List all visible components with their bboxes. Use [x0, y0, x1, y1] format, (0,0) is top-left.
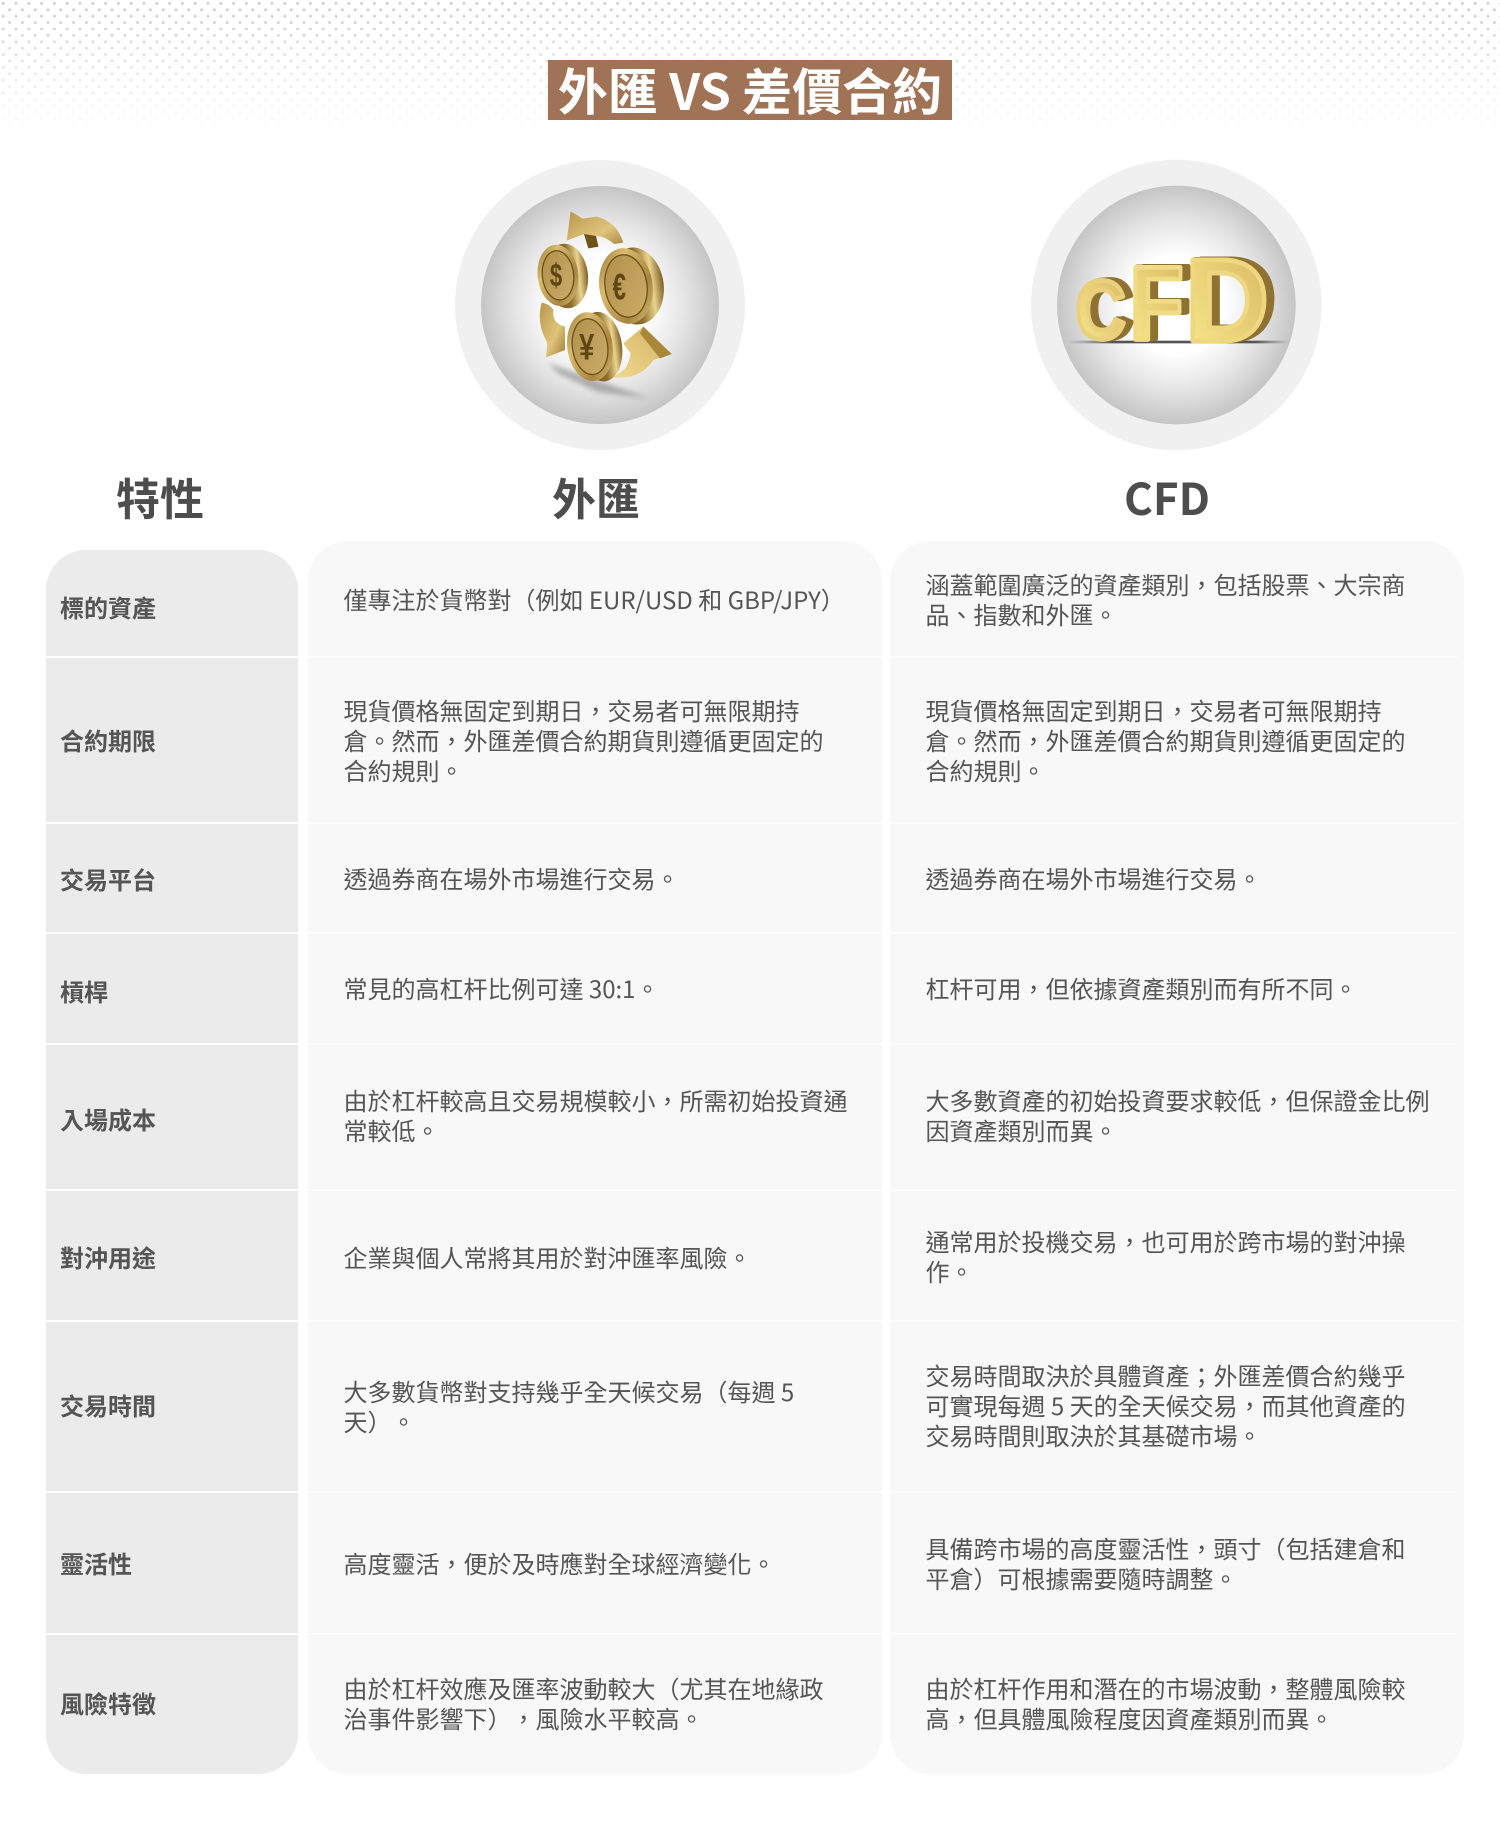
text: forex hedging: 企業與個人常將其用於對沖匯率風險。: [344, 1239, 752, 1274]
text: CFD contract term: [926, 692, 1406, 787]
text: CFD trading hours: 交易時間則取決於其基礎市場。: [926, 1417, 1262, 1452]
text: CFD entry cost: [926, 1082, 1430, 1147]
text: forex underlying: 僅專注於貨幣對（例如 EUR/USD 和 GBP/JPY）: [344, 581, 845, 616]
text: CFD trading hours: [926, 1357, 1406, 1452]
heading: 特性: 特性: [116, 464, 204, 528]
label: 對沖用途: 對沖用途: [60, 1239, 156, 1274]
text: CFD leverage: 杠杆可用，但依據資產類別而有所不同。: [926, 970, 1358, 1005]
icon: forex coins: [455, 160, 745, 450]
text: forex entry cost: 由於杠杆較高且交易規模較小，所需初始投資通: [344, 1082, 848, 1117]
text: CFD hedging: 通常用於投機交易，也可用於跨市場的對沖操: [926, 1223, 1406, 1258]
text: CFD underlying: 品、指數和外匯。: [926, 596, 1118, 631]
text: CFD platform: 透過券商在場外市場進行交易。: [926, 860, 1262, 895]
text: forex contract term: [344, 692, 824, 787]
text: forex contract term: 倉。然而，外匯差價合約期貨則遵循更固定的: [344, 722, 824, 757]
text: CFD hedging: 作。: [926, 1253, 974, 1288]
text: CFD trading hours: 可實現每週 5 天的全天候交易，而其他資產的: [926, 1387, 1406, 1422]
text: forex contract term: 現貨價格無固定到期日，交易者可無限期持: [344, 692, 800, 727]
text: CFD contract term: 倉。然而，外匯差價合約期貨則遵循更固定的: [926, 722, 1406, 757]
icon: CFD gold letters: [1031, 160, 1322, 450]
heading: 外匯: 外匯: [552, 464, 640, 528]
label: 合約期限: 合約期限: [60, 722, 156, 757]
text: forex risk: 治事件影響下），風險水平較高。: [344, 1700, 704, 1735]
text: forex flexibility: 高度靈活，便於及時應對全球經濟變化。: [344, 1545, 776, 1580]
icon: forex coins: $: [550, 257, 562, 293]
text: forex risk: [344, 1670, 824, 1735]
text: CFD flexibility: 具備跨市場的高度靈活性，頭寸（包括建倉和: [926, 1530, 1406, 1565]
icon: forex coins: €: [613, 266, 626, 308]
text: CFD risk: 高，但具體風險程度因資產類別而異。: [926, 1700, 1334, 1735]
text: forex trading hours: [344, 1373, 794, 1438]
text: forex contract term: 合約規則。: [344, 752, 464, 787]
text: CFD contract term: 現貨價格無固定到期日，交易者可無限期持: [926, 692, 1382, 727]
text: CFD contract term: 合約規則。: [926, 752, 1046, 787]
label: 靈活性: 靈活性: [60, 1545, 132, 1580]
panel: forex column: [308, 541, 882, 1774]
label: 標的資產: 標的資產: [60, 589, 156, 624]
icon: CFD gold letters: C: [1075, 262, 1126, 356]
text: CFD entry cost: 大多數資產的初始投資要求較低，但保證金比例: [926, 1082, 1430, 1117]
panel: feature labels: [46, 550, 298, 1774]
icon: forex coins: ¥: [579, 325, 595, 367]
text: forex trading hours: 天）。: [344, 1403, 416, 1438]
text: forex risk: 由於杠杆效應及匯率波動較大（尤其在地緣政: [344, 1670, 824, 1705]
text: CFD risk: [926, 1670, 1406, 1735]
icon: CFD gold letters: F: [1129, 245, 1184, 362]
label: 交易時間: 交易時間: [60, 1387, 156, 1422]
text: CFD entry cost: 因資產類別而異。: [926, 1112, 1118, 1147]
heading: CFD: CFD: [1124, 464, 1210, 528]
text: CFD risk: 由於杠杆作用和潛在的市場波動，整體風險較: [926, 1670, 1406, 1705]
text: forex entry cost: [344, 1082, 848, 1147]
text: forex trading hours: 大多數貨幣對支持幾乎全天候交易（每週 5: [344, 1373, 794, 1408]
text: CFD flexibility: 平倉）可根據需要隨時調整。: [926, 1560, 1238, 1595]
text: CFD flexibility: [926, 1530, 1406, 1595]
text: CFD hedging: [926, 1223, 1406, 1288]
panel: CFD column: [890, 541, 1464, 1774]
text: forex leverage: 常見的高杠杆比例可達 30:1。: [344, 970, 660, 1005]
text: forex platform: 透過券商在場外市場進行交易。: [344, 860, 680, 895]
text: forex entry cost: 常較低。: [344, 1112, 440, 1147]
label: 風險特徵: 風險特徵: [60, 1685, 156, 1720]
label: 槓桿: 槓桿: [60, 973, 108, 1008]
label: 交易平台: 交易平台: [60, 861, 156, 896]
icon: CFD gold letters: D: [1185, 235, 1269, 367]
label: 入場成本: 入場成本: [60, 1101, 156, 1136]
title: 外匯 VS 差價合約: [558, 53, 942, 125]
text: CFD trading hours: 交易時間取決於具體資產；外匯差價合約幾乎: [926, 1357, 1406, 1392]
text: CFD underlying: [926, 566, 1406, 631]
text: CFD underlying: 涵蓋範圍廣泛的資產類別，包括股票、大宗商: [926, 566, 1406, 601]
